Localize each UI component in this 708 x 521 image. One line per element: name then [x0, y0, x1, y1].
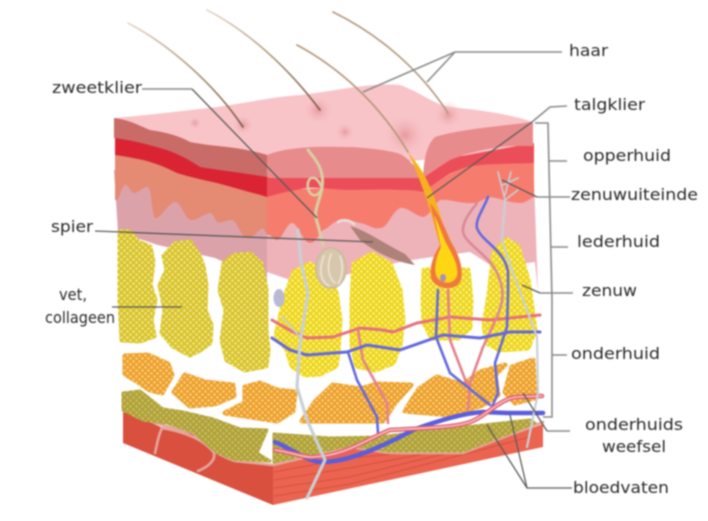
- fat lobes (orange): [125, 355, 535, 421]
- fat columns upper (yellow): [120, 232, 535, 375]
- muscle layer: [123, 410, 543, 505]
- dermis right face: [267, 180, 538, 293]
- label: vet, collageen: collageen: [45, 308, 115, 327]
- label: opperhuid: opperhuid: [583, 146, 671, 165]
- right layer: salmon: [267, 160, 534, 243]
- nerves: [274, 172, 538, 498]
- fat layer olive: [123, 391, 535, 462]
- connective septa: [123, 410, 543, 471]
- label: onderhuids weefsel: onderhuids: [585, 415, 683, 434]
- surface blotches: [188, 95, 462, 157]
- label: talgklier: talgklier: [574, 95, 645, 114]
- hair follicle: [408, 152, 462, 288]
- label: vet, collageen: vet,: [59, 285, 87, 304]
- label: onderhuid: onderhuid: [571, 344, 660, 363]
- left layer: dark pink: [114, 118, 267, 177]
- sweat gland: [308, 150, 346, 288]
- dermis left face: [114, 170, 267, 282]
- left layer: red: [115, 135, 267, 197]
- label: zenuwuiteinde: zenuwuiteinde: [571, 185, 698, 204]
- left layer: salmon: [115, 150, 267, 238]
- hairs: [128, 10, 448, 152]
- arteries upper: [272, 315, 540, 338]
- label: onderhuids weefsel: weefsel: [602, 437, 666, 456]
- label: bloedvaten: bloedvaten: [573, 478, 669, 497]
- label: zenuw: zenuw: [582, 281, 637, 300]
- epidermis top surface: [114, 84, 533, 178]
- label: spier: spier: [51, 217, 93, 236]
- label: onderhuids weefsel: [585, 415, 683, 456]
- leader lines: [95, 52, 573, 488]
- veins upper: [272, 332, 540, 355]
- right layer: pink: [267, 122, 533, 178]
- panel: skin block: [114, 84, 538, 293]
- muscle: arrector pili: [338, 220, 415, 265]
- label: lederhuid: lederhuid: [577, 232, 660, 251]
- label: zweetklier: zweetklier: [52, 78, 142, 97]
- blood vessels: [272, 197, 543, 462]
- label: haar: haar: [569, 41, 608, 60]
- right layer: red: [267, 143, 534, 197]
- label: vet, collageen: [45, 285, 115, 327]
- lower main vessels: [275, 412, 543, 462]
